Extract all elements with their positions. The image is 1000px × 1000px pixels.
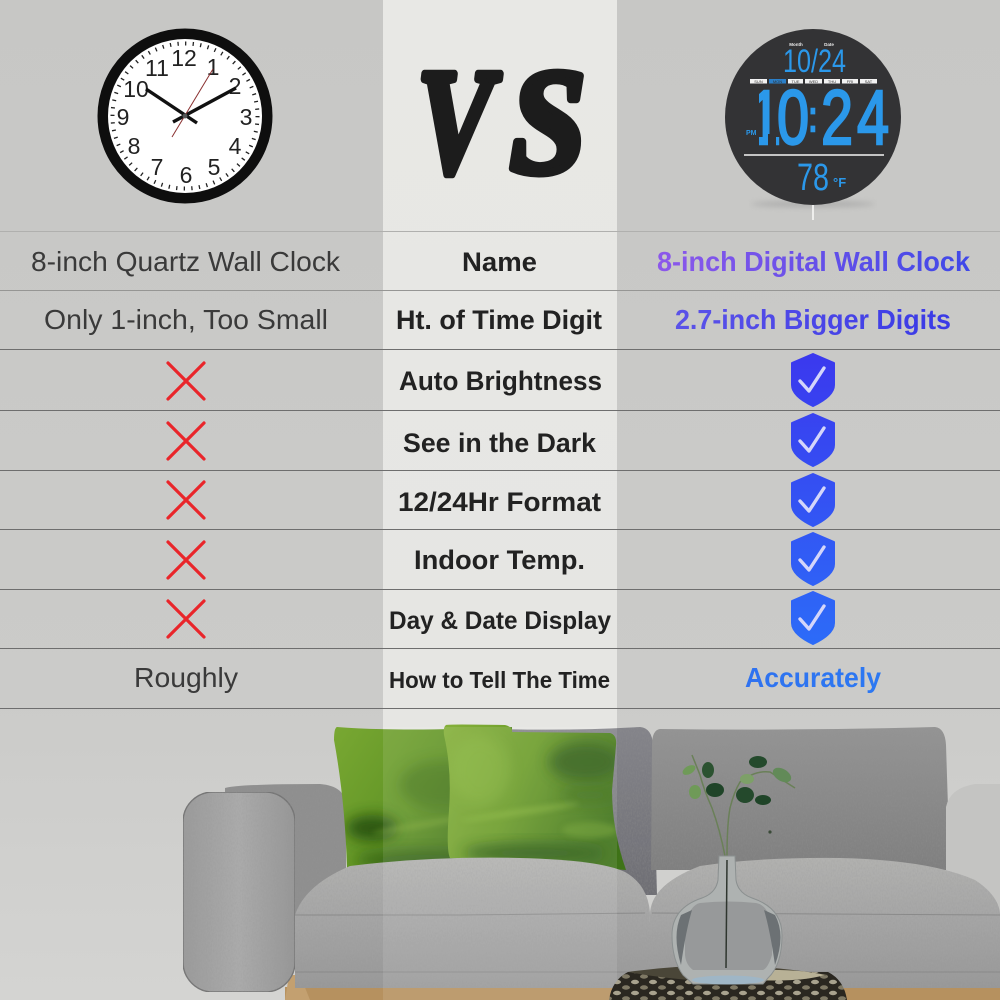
row: how to tell the time: Roughly (134, 662, 238, 693)
row: height of time digit: Ht. of Time Digit (396, 305, 602, 335)
digital wall clock: SUN (754, 79, 763, 84)
analog quartz wall clock: 5 (208, 154, 220, 180)
plant stems and leaves (681, 755, 795, 856)
back cushion right (651, 727, 950, 870)
analog quartz wall clock: 10 (123, 76, 149, 102)
row: day and date display: Day & Date Display (389, 607, 611, 635)
digital wall clock: 1 (749, 75, 781, 161)
row: 12/24hr format (168, 474, 834, 526)
left sofa arm front (183, 792, 295, 992)
left sofa arm back (225, 784, 346, 960)
glass vase (672, 856, 782, 984)
analog quartz wall clock: 8 (128, 133, 140, 159)
digital wall clock (725, 29, 901, 220)
row: name (31, 246, 970, 277)
row: height of time digit: Only 1-inch, Too Small (44, 304, 328, 335)
left seat cushion (295, 858, 650, 988)
analog quartz wall clock: 7 (151, 154, 163, 180)
row: see in the dark: See in the Dark (403, 428, 597, 458)
row: indoor temperature (168, 533, 834, 585)
analog quartz wall clock: 3 (240, 104, 252, 130)
digital wall clock: : (809, 93, 817, 140)
digital wall clock: SAT (865, 79, 873, 84)
center column band (383, 0, 617, 1000)
row: how to tell the time (134, 662, 881, 693)
back cushion left (500, 727, 657, 895)
row: see in the dark (168, 414, 834, 466)
row: height of time digit: 2.7-inch Bigger Digits (675, 304, 951, 335)
VS heading: S (510, 39, 586, 205)
analog quartz wall clock: 11 (145, 55, 169, 81)
row: day and date display (168, 592, 834, 644)
digital wall clock: TUE (792, 79, 800, 84)
analog quartz wall clock: 1 (207, 54, 219, 80)
seat seams (295, 913, 1000, 972)
digital wall clock: FRI (847, 79, 853, 84)
green pillow front (440, 722, 630, 872)
digital wall clock: WED (809, 79, 818, 84)
digital wall clock: Month (789, 42, 803, 47)
row: how to tell the time: Accurately (745, 662, 881, 693)
analog quartz wall clock: 12 (171, 45, 197, 71)
row: how to tell the time: How to Tell The Time (389, 667, 610, 693)
right sofa arm (946, 784, 1000, 920)
table row dividers (0, 232, 1000, 708)
digital wall clock: °F (833, 175, 846, 190)
digital wall clock: PM (746, 130, 757, 137)
digital wall clock: THU (828, 79, 836, 84)
analog quartz wall clock: 4 (229, 133, 242, 159)
row: name: 8-inch Digital Wall Clock (657, 246, 970, 277)
digital wall clock: 10/24 (783, 43, 846, 79)
analog quartz wall clock: 9 (117, 104, 129, 130)
VS heading (417, 39, 586, 205)
digital wall clock: 24 (821, 75, 889, 161)
wooden sofa base (285, 975, 1000, 1000)
row: auto brightness (168, 354, 834, 406)
analog quartz wall clock: 6 (180, 162, 192, 188)
row: indoor temperature: Indoor Temp. (414, 545, 585, 575)
row: 12/24hr format: 12/24Hr Format (398, 487, 601, 517)
right seat cushion (646, 858, 1000, 988)
digital wall clock: Date (824, 42, 834, 47)
digital wall clock: 0 (777, 75, 809, 161)
row: name: 8-inch Quartz Wall Clock (31, 246, 341, 277)
digital wall clock: 78 (797, 157, 829, 199)
row: auto brightness: Auto Brightness (399, 366, 602, 396)
green pillow back (334, 727, 512, 868)
row: height of time digit (44, 304, 951, 335)
band overlay on sofa (383, 727, 617, 1000)
VS heading: V (417, 39, 501, 205)
digital wall clock: MON (773, 79, 782, 84)
analog quartz wall clock: 2 (229, 73, 241, 99)
coffee table (609, 966, 847, 1000)
sofa scene (183, 722, 1000, 1000)
analog quartz wall clock (98, 28, 272, 204)
row: name: Name (462, 247, 537, 277)
